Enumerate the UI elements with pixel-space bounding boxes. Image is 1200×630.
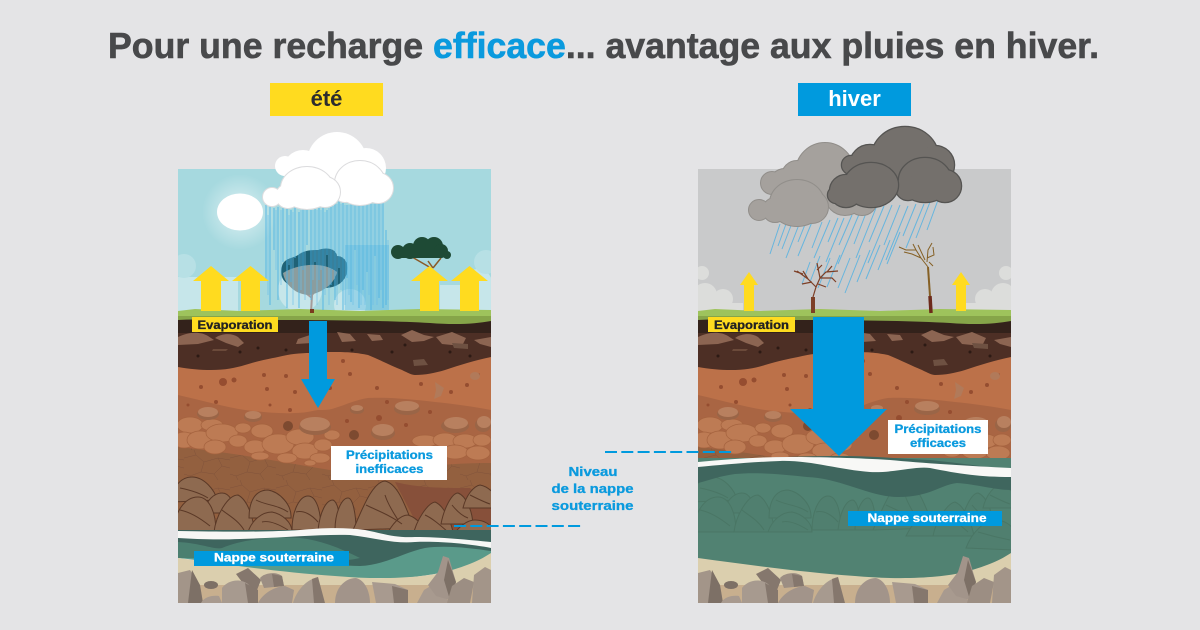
- arrow: infiltration: [790, 317, 887, 456]
- panel: hiver: [692, 127, 1015, 603]
- label: evaporation: Evaporation: [198, 320, 272, 332]
- badge: hiver: hiver: [828, 86, 881, 111]
- cloud: white front left: [263, 167, 340, 209]
- label: niveau de la nappe: Niveau: [568, 465, 618, 479]
- cloud: grey back: [761, 143, 877, 215]
- sky and soil: [692, 169, 1015, 603]
- dashed line: winter level: [605, 451, 733, 453]
- label: evaporation: [708, 317, 795, 332]
- label: nappe souterraine: [194, 551, 349, 566]
- label: nappe souterraine: Nappe souterraine: [868, 513, 986, 525]
- label: niveau de la nappe: de la nappe: [552, 482, 634, 496]
- cloud: grey front: [749, 180, 828, 226]
- rain: [266, 200, 389, 310]
- badge: hiver: [798, 83, 911, 116]
- evaporation arrows: [193, 266, 488, 311]
- cloud: white front right: [333, 161, 393, 205]
- dashed line: summer level: [454, 525, 582, 527]
- label: précipitations inefficaces: inefficaces: [356, 464, 424, 476]
- cloud: dark front left: [828, 163, 898, 207]
- arrow: infiltration: [301, 321, 335, 408]
- sky and soil: [172, 169, 498, 603]
- tree: teal canopy: [281, 248, 348, 313]
- label: précipitations efficaces: [888, 420, 988, 454]
- label: evaporation: [192, 317, 278, 332]
- badge: été: [270, 83, 383, 116]
- cloud: dark back: [842, 127, 954, 187]
- cloud: white back: [275, 132, 386, 192]
- cloud: dark front right: [896, 158, 961, 202]
- sun: [217, 194, 263, 230]
- label: nappe souterraine: [848, 511, 1002, 526]
- panel: été: [172, 132, 498, 603]
- tree: acacia: [391, 237, 451, 268]
- label: précipitations inefficaces: [331, 446, 447, 480]
- rain: [770, 200, 938, 293]
- badge: été: été: [311, 86, 342, 111]
- label: précipitations inefficaces: Précipitations: [346, 450, 433, 462]
- tree: bare left: [794, 263, 838, 313]
- label: précipitations efficaces: Précipitations: [894, 424, 982, 436]
- label: niveau de la nappe: souterraine: [552, 499, 634, 513]
- tree: bare right: [899, 243, 934, 313]
- title: Pour une recharge efficace... avantage aux pluies en hiver.: [108, 25, 1099, 66]
- label: précipitations efficaces: efficaces: [910, 438, 966, 450]
- label: evaporation: Evaporation: [714, 320, 789, 332]
- label: nappe souterraine: Nappe souterraine: [214, 552, 334, 564]
- label: niveau de la nappe: [552, 465, 634, 513]
- evaporation arrows: [740, 272, 970, 311]
